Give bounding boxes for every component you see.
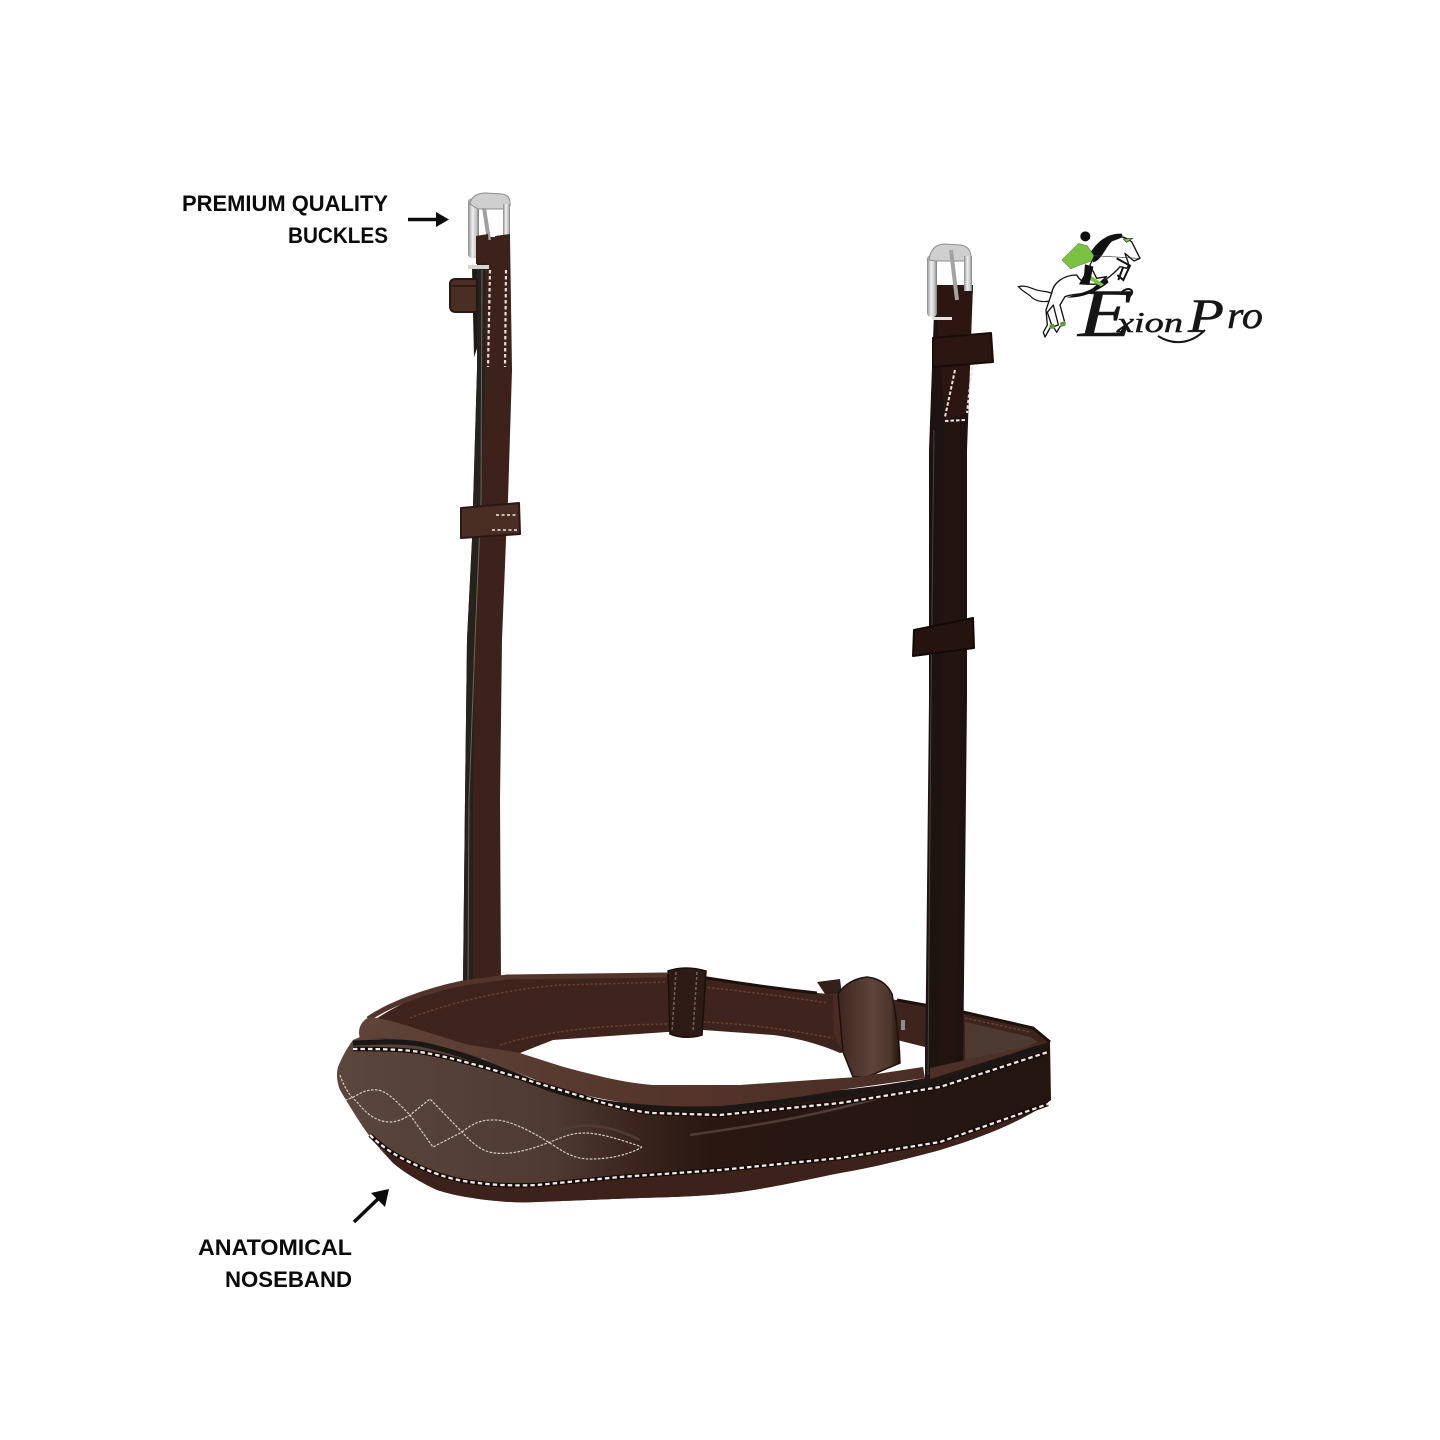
tan inner lining at right <box>965 1022 1038 1060</box>
horse tail <box>1018 286 1052 302</box>
rider saddle pad <box>1087 275 1104 286</box>
logo wordmark: E <box>1077 275 1133 351</box>
rider jacket <box>1062 243 1094 269</box>
product: left cheek strap <box>450 193 520 984</box>
gloss highlight <box>560 1095 890 1140</box>
side buckle cover <box>817 977 905 1077</box>
strap keeper <box>668 968 706 1037</box>
lower edge strip <box>370 1100 1051 1202</box>
horse hoof bands <box>1049 321 1066 329</box>
right lower keeper <box>913 618 974 656</box>
left lower keeper <box>461 503 520 538</box>
horse bridle <box>1093 238 1138 258</box>
top edge stitching <box>353 1049 1048 1115</box>
label: anatomical noseband: ANATOMICAL <box>198 1235 352 1260</box>
horse body <box>1043 237 1140 337</box>
bottom edge stitching <box>370 1104 1048 1185</box>
product: right cheek strap <box>913 244 993 1079</box>
logo wordmark <box>1077 275 1263 351</box>
horse mane <box>1090 234 1122 262</box>
logo horse and rider <box>1018 231 1140 337</box>
logo wordmark: P <box>1187 290 1224 343</box>
rider boot <box>1079 264 1093 285</box>
right upper keeper <box>933 333 993 367</box>
label: premium quality buckles: BUCKLES <box>288 223 388 248</box>
right buckle <box>927 244 972 320</box>
label: anatomical noseband <box>198 1235 352 1292</box>
logo swash <box>1122 289 1205 342</box>
left upper keeper <box>450 279 477 312</box>
logo: ExionPro <box>1018 231 1263 351</box>
logo wordmark: ro <box>1227 295 1263 337</box>
padded top roll <box>359 1017 925 1106</box>
arrow: to buckle <box>408 212 449 227</box>
left buckle <box>468 193 510 269</box>
label: premium quality buckles: PREMIUM QUALITY <box>182 191 388 216</box>
arrow: to noseband <box>354 1189 389 1222</box>
decorative diamond stitching <box>340 1075 642 1159</box>
label: anatomical noseband: NOSEBAND <box>225 1267 352 1292</box>
horse belly swoosh <box>1067 278 1109 298</box>
product: back strap of noseband <box>360 968 1050 1082</box>
product: front noseband <box>337 1017 1051 1202</box>
front band body <box>337 1037 1051 1202</box>
label: premium quality buckles <box>182 191 388 248</box>
horse forelegs <box>1117 258 1130 280</box>
logo wordmark: xion <box>1116 308 1183 339</box>
rider head <box>1080 231 1090 241</box>
